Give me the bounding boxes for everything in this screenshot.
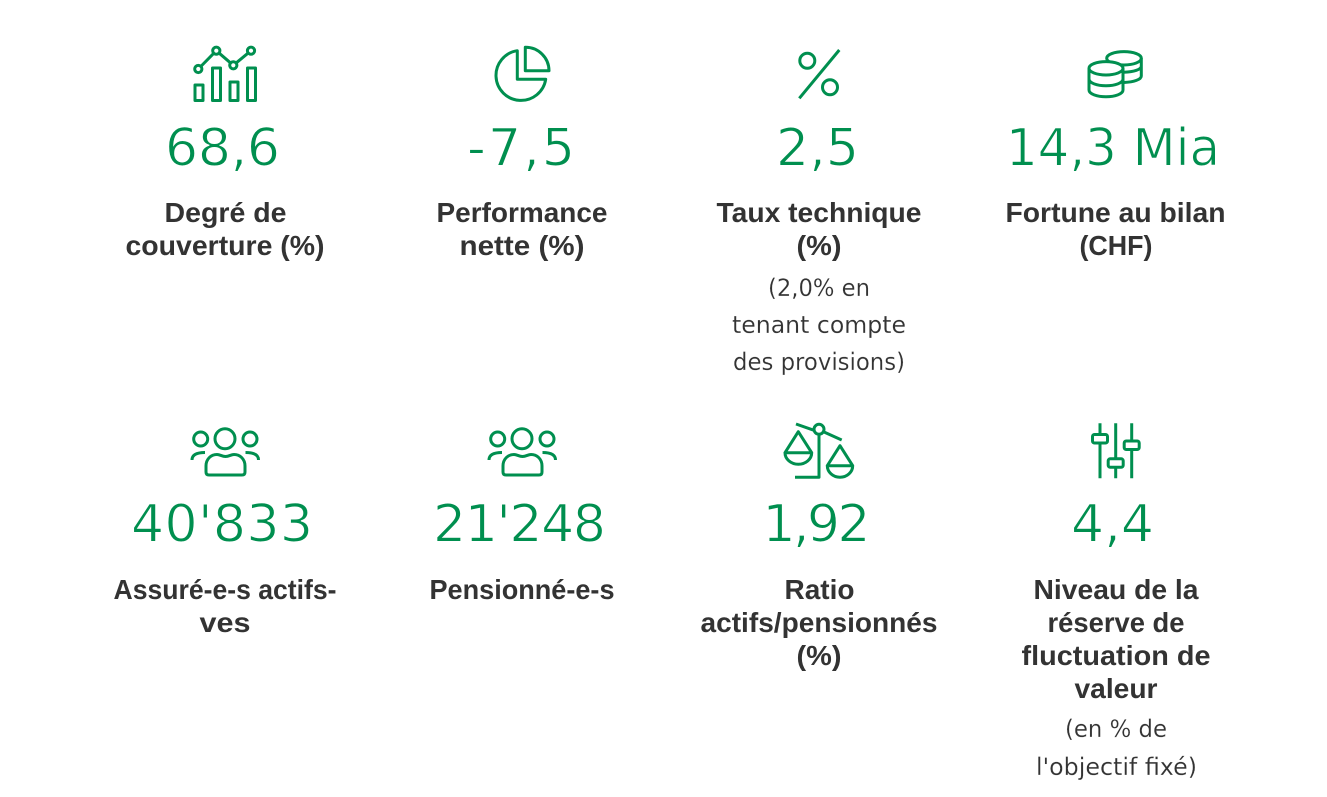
icon: sliders bbox=[1092, 423, 1139, 478]
note: tenant compte bbox=[732, 311, 906, 339]
panel: fortune au bilan bbox=[1006, 52, 1226, 261]
note bbox=[732, 274, 906, 376]
label: valeur bbox=[1074, 673, 1158, 704]
icon: pie chart bbox=[496, 47, 549, 100]
label: ves bbox=[200, 607, 250, 638]
panel: taux technique bbox=[716, 50, 922, 376]
value: 40'833 bbox=[131, 494, 313, 554]
value: 2,5 bbox=[776, 118, 859, 178]
icon: percent bbox=[799, 50, 839, 98]
label bbox=[126, 197, 324, 261]
label: Pensionné-e-s bbox=[430, 574, 614, 605]
panel: degré de couverture bbox=[126, 47, 324, 261]
label: actifs/pensionnés bbox=[700, 607, 938, 638]
icon: coins bbox=[1089, 52, 1141, 97]
label: (%) bbox=[796, 230, 842, 261]
label: (CHF) bbox=[1080, 230, 1152, 261]
icon: scales bbox=[785, 424, 853, 477]
label: Fortune au bilan bbox=[1006, 197, 1226, 228]
label bbox=[700, 574, 938, 671]
icon: chart bbox=[195, 47, 256, 100]
panel: assuré-e-s actifs-ves bbox=[114, 429, 336, 638]
note: (en % de bbox=[1065, 715, 1167, 743]
note: l'objectif fixé) bbox=[1036, 753, 1197, 781]
value: 4,4 bbox=[1071, 494, 1154, 554]
value: 68,6 bbox=[165, 118, 280, 178]
panel: performance nette bbox=[436, 47, 608, 261]
note: des provisions) bbox=[733, 348, 905, 376]
label bbox=[1022, 574, 1210, 704]
label: réserve de bbox=[1048, 607, 1184, 638]
label: Degré de bbox=[164, 197, 286, 228]
note: (2,0% en bbox=[768, 274, 870, 302]
label bbox=[716, 197, 922, 261]
panel: ratio actifs/pensionnés bbox=[700, 424, 938, 671]
icon: people bbox=[192, 429, 258, 475]
panel: réserve de fluctuation bbox=[1022, 423, 1210, 781]
label: (%) bbox=[796, 640, 842, 671]
icon: people bbox=[489, 429, 556, 475]
label: Performance bbox=[436, 197, 608, 228]
label: couverture (%) bbox=[126, 230, 324, 261]
label: fluctuation de bbox=[1022, 640, 1210, 671]
label bbox=[436, 197, 608, 261]
label: nette (%) bbox=[460, 230, 584, 261]
value: -7,5 bbox=[467, 118, 575, 178]
label: Niveau de la bbox=[1034, 574, 1199, 605]
label bbox=[1006, 197, 1226, 261]
label: Taux technique bbox=[716, 197, 922, 228]
label: Assuré-e-s actifs- bbox=[114, 574, 336, 605]
value: 1,92 bbox=[762, 494, 870, 554]
value: 14,3 Mia bbox=[1006, 118, 1220, 178]
panel: pensionné-e-s bbox=[430, 429, 614, 605]
label: Ratio bbox=[784, 574, 854, 605]
label bbox=[114, 574, 336, 638]
value: 21'248 bbox=[433, 494, 606, 554]
note bbox=[1036, 715, 1197, 781]
